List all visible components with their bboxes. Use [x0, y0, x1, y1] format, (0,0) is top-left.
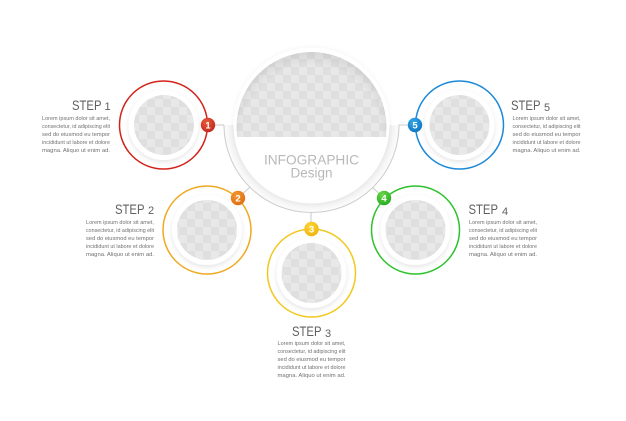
- lower crescent band: [224, 125, 399, 212]
- badge 5: 5: [412, 120, 418, 132]
- step 1 text: incididunt ut labore et dolore: [42, 140, 110, 146]
- step 5 text: [511, 97, 581, 154]
- step 1 text: magna. Aliquo ut enim ad.: [42, 148, 110, 154]
- step 2 text: magna. Aliquo ut enim ad.: [86, 252, 154, 258]
- step 1 text: sed do eiusmod eu tempor: [42, 132, 110, 138]
- step 3 text: 3: [325, 328, 331, 340]
- badge 4: [377, 191, 391, 205]
- step 3 circle: [268, 229, 356, 317]
- step 5 text: consectetur, id adipiscing elit: [512, 124, 581, 130]
- step 2 text: consectetur, id adipiscing elit: [86, 228, 154, 234]
- step 4 text: Lorem ipsum dolor sit amet,: [469, 220, 537, 226]
- connector lines: [208, 125, 415, 229]
- step 5 text: Lorem ipsum dolor sit amet,: [512, 116, 581, 122]
- badge 3: [304, 222, 319, 236]
- step 3 text: [278, 323, 346, 379]
- step 5 text: magna. Aliquo ut enim ad.: [512, 148, 581, 154]
- step 5 text: incididunt ut labore et dolore: [512, 140, 580, 146]
- step 1 text: [42, 97, 111, 154]
- step 5 text: sed do eiusmod eu tempor: [512, 132, 581, 138]
- step 1 text: 1: [104, 101, 111, 113]
- step 4 text: consectetur, id adipiscing elit: [469, 228, 537, 234]
- central circle: [224, 48, 399, 212]
- badge 3: 3: [309, 224, 314, 236]
- step 3 text: magna. Aliquo ut enim ad.: [278, 373, 346, 379]
- badge 1: 1: [205, 120, 211, 132]
- central title: INFOGRAPHIC: [264, 152, 359, 168]
- step 2 text: 2: [148, 205, 154, 217]
- central subtitle: Design: [290, 166, 333, 180]
- badge 5: [408, 118, 422, 132]
- step 3 text: sed do eiusmod eu tempor: [278, 357, 346, 363]
- step 1 text: consectetur, id adipiscing elit: [42, 124, 110, 130]
- step 4 text: magna. Aliquo ut enim ad.: [469, 252, 537, 258]
- step 1 text: STEP: [72, 97, 102, 113]
- step 2 circle: [163, 186, 251, 274]
- step 3 text: Lorem ipsum dolor sit amet,: [278, 341, 346, 347]
- badge 2: [231, 191, 245, 205]
- step 3 text: consectetur, id adipiscing elit: [278, 349, 346, 355]
- step 4 text: sed do eiusmod eu tempor: [469, 236, 537, 242]
- step 1 text: Lorem ipsum dolor sit amet,: [42, 116, 110, 122]
- step 5 text: STEP: [511, 97, 540, 113]
- step 2 text: [86, 201, 154, 258]
- badge 2: 2: [235, 194, 241, 204]
- central image placeholder: [236, 52, 386, 137]
- step 2 text: incididunt ut labore et dolore: [86, 244, 154, 250]
- step 4 text: incididunt ut labore et dolore: [469, 244, 537, 250]
- badge 1: [201, 118, 215, 132]
- step 2 text: STEP: [115, 201, 144, 217]
- step 4 text: STEP: [468, 201, 498, 217]
- step 4 text: [468, 201, 537, 258]
- badge 4: 4: [381, 194, 387, 204]
- step 1 circle: [120, 81, 208, 169]
- step 2 text: Lorem ipsum dolor sit amet,: [86, 220, 154, 226]
- step 5 circle: [416, 81, 504, 169]
- step 4 text: 4: [502, 206, 508, 218]
- step 5 text: 5: [544, 102, 550, 114]
- step 3 text: incididunt ut labore et dolore: [278, 365, 346, 371]
- step 4 circle: [372, 186, 460, 274]
- step 3 text: STEP: [292, 323, 322, 339]
- step 2 text: sed do eiusmod eu tempor: [86, 236, 154, 242]
